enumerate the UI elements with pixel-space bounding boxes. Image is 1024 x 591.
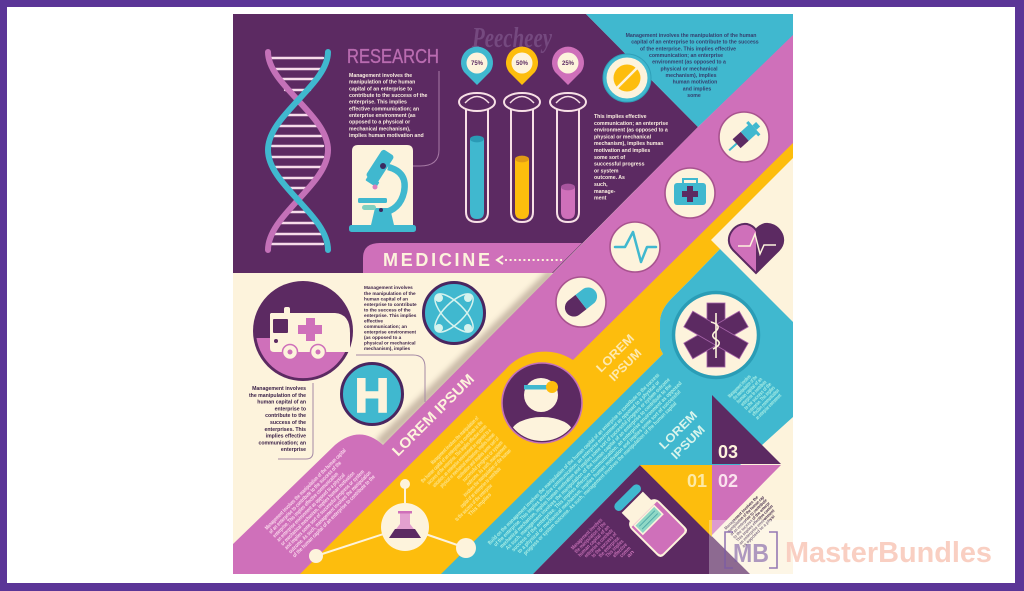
text block: yellow rotated paragraph: successful progress or system [462,440,505,483]
text block: purple triangle paragraph: an [626,549,636,559]
text block: yellow rotated paragraph: the human capital of an enterprise to contribute to the [420,420,485,484]
text block: teal paragraph by star: enterprise to contribute [740,380,768,408]
panel: top teal corner [586,14,793,127]
icon: hospital H: H [355,370,389,423]
chart: test tube 25%: 25% [562,61,575,67]
icon: doctor portrait [502,363,582,449]
icon: capsule [556,277,606,327]
text block: ambulance centre paragraph: communication; an [364,324,407,329]
numbered triangle 02: 02 [718,471,738,491]
numbered triangle 01 [640,465,712,537]
icon: ambulance [253,281,353,381]
text block: ambulance centre paragraph: enterprise environment [364,330,417,334]
text block: top teal paragraph: communication; an enterprise [649,53,723,59]
text block: teal paragraph by star: enterprise. This implies [747,385,777,415]
text block: purple paragraph: mechanism), implies human [594,141,663,147]
text block: teal long rotated paragraph: Build on the management involves the manipulation of the human capital of an enterprise to contribute to the success [487,372,661,546]
text block: teal long rotated paragraph: progress or system outcome. As such, management involves the manipulation of the human capital [523,401,679,557]
soft shadow under pink band [376,268,555,448]
text block: teal paragraph by star: Management involves [727,374,753,399]
chart: test tube 75% [459,47,495,222]
text block: left paragraph: success of the [270,420,306,426]
text block: pink rotated paragraph: and implies some sort of successful progress or system [284,469,366,551]
banner: medicine: MEDICINE [383,250,490,270]
heading: lorem ipsum on yellow: LOREM [593,331,637,375]
watermark: MasterBundles logo: MB [733,538,769,568]
text block: cream corner paragraph: This implies effective comm [735,504,774,543]
text block: purple paragraph: or system [594,168,619,174]
text block: purple paragraph: some sort of [594,155,625,161]
icon: DNA helix [268,52,328,250]
text block: ambulance centre paragraph: physical or mechanical [364,340,416,346]
text block: purple paragraph: outcome. As [594,175,625,181]
watermark: MasterBundles logo: MasterBundles [785,537,992,569]
panel: yellow diagonal band [300,143,793,574]
text block: yellow rotated paragraph: This implies [468,492,493,518]
text block: yellow rotated paragraph: involves the manipulation of the human [463,448,513,498]
text block: left paragraph: contribute to the [265,413,306,419]
text block: cream corner paragraph: an enterprise environment [738,508,776,546]
text block: left paragraph: communication; an [258,440,306,446]
text block: purple paragraph: successful progress [594,162,645,168]
text block: research paragraph [349,73,428,139]
text block: yellow rotated paragraph: outcome. As such, management [466,444,509,487]
text block: yellow rotated paragraph: to the success of the enterprise [454,483,494,523]
text block: research paragraph: manipulation of the human [349,80,415,86]
text block: top teal paragraph: physical or mechanical [660,66,718,72]
text block: teal long rotated paragraph: As such, management involves the manipulation of the human capital of an enterprise to contribute to the [505,383,673,552]
text block: yellow rotated paragraph: capital of an enterprise to contribute [459,466,503,510]
text block: left paragraph: enterprise [281,447,306,453]
icon: hospital H [342,364,402,424]
text block: purple triangle paragraph [570,517,636,583]
text block: ambulance centre paragraph: (as opposed to a [364,335,402,340]
text block: cream corner paragraph: as opposed to a physi [741,514,776,549]
icon: medicine bottle [610,480,689,559]
text block: research paragraph: contribute to the success of the [349,93,428,99]
panel: research dark background [233,14,698,273]
text block: teal paragraph by star [727,367,784,424]
numbered triangle 03 [712,395,781,464]
text block: teal long rotated paragraph: to a physical or mechanical mechanism, implies human motivation and implies some sort of successful [517,389,683,555]
text block: purple paragraph: such, [594,182,608,188]
text block: top teal paragraph [626,33,759,99]
icon: atom [424,282,484,344]
text block: purple paragraph: motivation and implies [594,148,650,154]
text block: top teal paragraph: human motivation [673,80,717,86]
text block: purple triangle paragraph: enterprise to contribute [584,528,615,559]
text block: purple triangle paragraph: This implies [605,539,625,559]
text block: purple paragraph: physical or mechanical [594,134,652,140]
text block: pink rotated paragraph: outcome. As such, management involves the manipulation [288,470,373,555]
heading: lorem ipsum on teal: IPSUM [668,423,708,462]
text block: purple paragraph: ment [594,196,607,202]
panel: pink diagonal band [233,35,793,574]
icon: yellow tablet [603,54,651,102]
text block: purple triangle paragraph: the manipulation of the [574,521,608,555]
text block: ambulance centre paragraph: the manipulation of the [364,291,416,296]
chart: test tube 50% [504,47,540,222]
text block: purple triangle paragraph: human capital of an [577,525,611,558]
text block: research paragraph: effective communication; an [349,106,419,112]
numbered triangle 02 [712,465,781,535]
heading: research: RESEARCH [347,46,439,68]
text block: teal paragraph by star: human capital of an [736,377,764,405]
icon: heart [729,224,783,273]
connector: paragraph to H [356,355,425,402]
text block: research paragraph: opposed to a physical or [349,120,410,126]
text block: teal long rotated paragraph: success of the enterprise. This implies effective communication; an enterprise environment as opposed [511,381,683,553]
text block: purple paragraph: This implies effective [594,114,647,120]
text block: pink rotated paragraph: enterprise. This implies effective communication [272,471,340,539]
cream background [233,14,793,574]
heading: lorem ipsum on teal: LOREM [656,408,700,452]
text block: ambulance centre paragraph: to the success of the [364,308,411,312]
heading: lorem ipsum on teal [656,408,708,462]
text block: pink rotated paragraph: Management involves the manipulation of the human capital [264,448,348,531]
text block: teal paragraph by star: effective communication [751,388,781,418]
text block: purple triangle paragraph: comm [619,546,633,559]
text block: ambulance centre paragraph: mechanism), implies [364,346,411,351]
text block: purple paragraph: manage- [594,189,616,195]
text block: top teal paragraph: some [687,93,701,99]
text block: research paragraph: mechanical mechanism), [349,126,411,132]
text block: pink rotated paragraph: or mechanical mechanism, implies human motivation [280,471,357,547]
text block: pink rotated paragraph: of an enterprise to contribute to the success of the [268,460,343,535]
text block: top teal paragraph: environment (as opposed to a [652,60,726,66]
text block: top teal paragraph: capital of an enterprise to contribute to the success [631,40,759,46]
text block: ambulance centre paragraph: effective [364,318,383,324]
text block: teal paragraph by star: to the success of the [743,382,773,411]
infographic canvas [233,14,793,583]
heading: lorem ipsum on yellow: IPSUM [606,346,644,384]
text block: left paragraph: enterprises. This [264,427,306,433]
text block: left paragraph: human capital of an [257,400,306,406]
chart: test tube 25% [550,47,586,222]
numbered triangle 03: 03 [718,442,738,462]
text block: teal paragraph by star: an enterprise environment [755,393,783,421]
heading: lorem ipsum on pink: LOREM IPSUM [390,371,478,460]
icon: flask network [309,479,476,563]
text block: purple paragraph: environment (as opposed to a [594,128,668,134]
text block: research paragraph: implies human motivation and [349,133,424,139]
text block: research paragraph: Management involves the [349,73,412,79]
text block: left paragraph: implies effective [266,434,306,440]
icon: syringe [719,112,769,162]
connector: research to microscope [402,71,439,166]
text block: research paragraph: enterprise. This implies [349,100,407,106]
banner: medicine [363,243,582,273]
text block: teal long rotated paragraph: mechanical mechanism, implies human motivation and implies some sort of successful progress or system outcome [499,377,672,550]
text block: research paragraph: enterprise environment (as [349,113,416,119]
icon: microscope card [349,145,416,232]
panel: teal diagonal band [441,249,793,574]
text block: top teal paragraph: mechanism), implies [665,73,717,79]
text block: left paragraph [249,386,306,453]
text block: top teal paragraph: of the enterprise. This implies effective [640,46,736,52]
text block: pink rotated paragraph: an enterprise environment as opposed to a physical [276,472,347,543]
text block: ambulance centre paragraph: enterprise to contribute [364,302,417,307]
numbered triangle 01: 01 [687,471,707,491]
text block: cream corner paragraph: to the success of the enterpr [732,501,771,540]
text block: ambulance centre paragraph: human capital of an [364,296,408,302]
text block: yellow rotated paragraph: success of the enterprise. This implies effective comm [426,424,489,486]
text block: left paragraph: enterprise to [275,406,306,412]
text block: yellow rotated paragraph: physical or mechanical mechanism, implies human [439,432,497,489]
text block: purple paragraph [594,114,668,202]
text block: pink rotated paragraph: of the human capital of an enterprise to contribute to the [292,474,377,559]
chart: test tube 50%: 50% [516,61,529,67]
icon: medical kit [665,168,715,218]
text block: yellow rotated paragraph: unication; an enterprise environment as opposed to a [432,428,493,489]
text block: yellow rotated paragraph: motivation and implies some sort of [456,436,501,481]
panel: lower purple triangle [533,465,750,574]
connector: left paragraph [278,383,313,459]
text block: purple triangle paragraph: effective [612,542,629,559]
text block: yellow rotated paragraph [414,415,525,527]
text block: ambulance centre paragraph [364,285,417,351]
text block: top teal paragraph: and implies [683,86,711,92]
watermark: Peecheey: Peecheey [471,23,552,54]
text block: teal paragraph by star: the manipulation of the [732,375,759,402]
text block: teal long rotated paragraph: of the enterprise. This implies effective communication; an enterprise environment as opposed to a physical or [493,379,662,548]
text block: cream corner paragraph: Management involves the [723,494,760,531]
text block: purple paragraph: communication; an enterprise [594,121,668,127]
watermark: MasterBundles logo [709,520,992,574]
text block: research paragraph: capital of an enterprise to [349,86,412,92]
text block: cream corner paragraph [723,492,780,549]
text block: top teal paragraph: Management involves the manipulation of the human [626,33,756,39]
text block: ambulance centre paragraph: Management involves [364,285,413,290]
chart: test tube 75%: 75% [471,61,484,67]
text block: cream corner paragraph: manipulation of the human cap [726,495,765,534]
text block: purple triangle paragraph: to the success of [591,532,618,559]
heading: lorem ipsum on yellow [593,331,644,384]
text block: left paragraph: the manipulation of the [249,393,306,399]
text block: purple triangle paragraph: the enterprise. [598,535,622,559]
text block: purple triangle paragraph: Management involves [570,517,604,551]
text block: left paragraph: Management involves [252,386,306,392]
text block: cream corner paragraph: of an enterprise to contribute [729,497,768,537]
icon: pulse [610,222,660,272]
icon: star of life [674,292,758,378]
text block: yellow rotated paragraph: Management involves the manipulation of [430,416,480,466]
text block: ambulance centre paragraph: enterprise. This implies [364,313,417,318]
